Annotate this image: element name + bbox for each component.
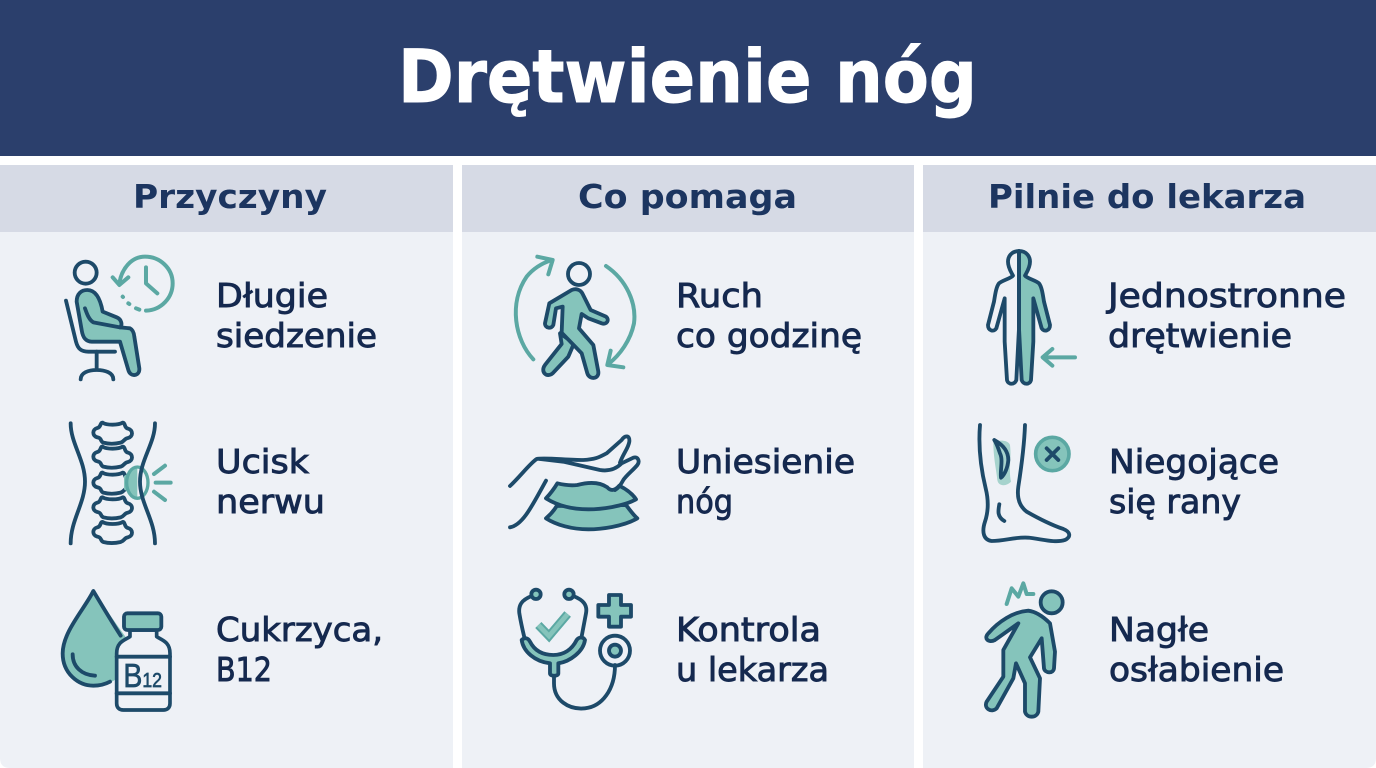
text: Niegojące się rany	[1109, 442, 1279, 521]
icon: blood drop and B12 bottle: B12	[123, 658, 162, 695]
text: Kontrola u lekarza	[676, 610, 829, 689]
text: Ucisk nerwu	[216, 442, 325, 521]
title: Drętwienie nóg	[398, 35, 977, 120]
heading: Pilnie do lekarza: Pilnie do lekarza	[988, 177, 1306, 216]
icon: body with one side affected	[988, 251, 1075, 384]
text: Kontrola u lekarza: u lekarza	[676, 650, 829, 689]
text: Niegojące się rany: Niegojące	[1109, 442, 1279, 481]
icon: raised legs on pillows	[510, 436, 639, 529]
text: Jednostronne drętwienie: Jednostronne	[1106, 276, 1346, 315]
text: Ucisk nerwu: nerwu	[216, 482, 325, 521]
text: Długie siedzenie: Długie	[216, 276, 328, 315]
icon: blood drop and B12 bottle	[63, 591, 170, 710]
panel heading band	[462, 165, 914, 232]
text: Ruch co godzinę	[676, 276, 862, 355]
icon: person with sudden weakness	[986, 583, 1063, 717]
header banner	[0, 0, 1376, 156]
text: Ucisk nerwu: Ucisk	[216, 442, 310, 481]
panel: Pilnie do lekarza	[923, 165, 1376, 768]
text: Cukrzyca, B12	[216, 610, 383, 689]
text: Nagłe osłabienie: osłabienie	[1109, 650, 1284, 689]
icon: seated person with clock	[66, 257, 173, 379]
text: Cukrzyca, B12: B12	[216, 650, 272, 689]
text: Kontrola u lekarza: Kontrola	[676, 610, 821, 649]
icon: leg with wound	[979, 425, 1069, 541]
heading: Przyczyny: Przyczyny	[133, 177, 327, 216]
text: Uniesienie nóg	[676, 442, 855, 521]
heading: Co pomaga: Co pomaga	[578, 177, 797, 216]
text: Jednostronne drętwienie	[1106, 276, 1346, 355]
text: Nagłe osłabienie	[1109, 610, 1284, 689]
icon: stethoscope with check and plus	[519, 590, 631, 709]
panel heading band	[923, 165, 1376, 232]
text: Cukrzyca, B12: Cukrzyca,	[216, 610, 383, 649]
text: Uniesienie nóg: Uniesienie	[676, 442, 855, 481]
text: Niegojące się rany: się rany	[1109, 482, 1241, 521]
text: Długie siedzenie: siedzenie	[216, 316, 377, 355]
panel heading band	[0, 165, 453, 232]
icon: walking person with arrows	[516, 257, 634, 378]
text: Ruch co godzinę: co godzinę	[676, 316, 862, 355]
text: Nagłe osłabienie: Nagłe	[1109, 610, 1209, 649]
text: Jednostronne drętwienie: drętwienie	[1108, 316, 1292, 355]
text: Ruch co godzinę: Ruch	[676, 276, 763, 315]
text: Uniesienie nóg: nóg	[676, 482, 733, 521]
text: Długie siedzenie	[216, 276, 377, 355]
panel: Przyczyny	[0, 165, 453, 768]
icon: spine with compressed nerve	[71, 423, 171, 543]
panel: Co pomaga	[462, 165, 914, 768]
